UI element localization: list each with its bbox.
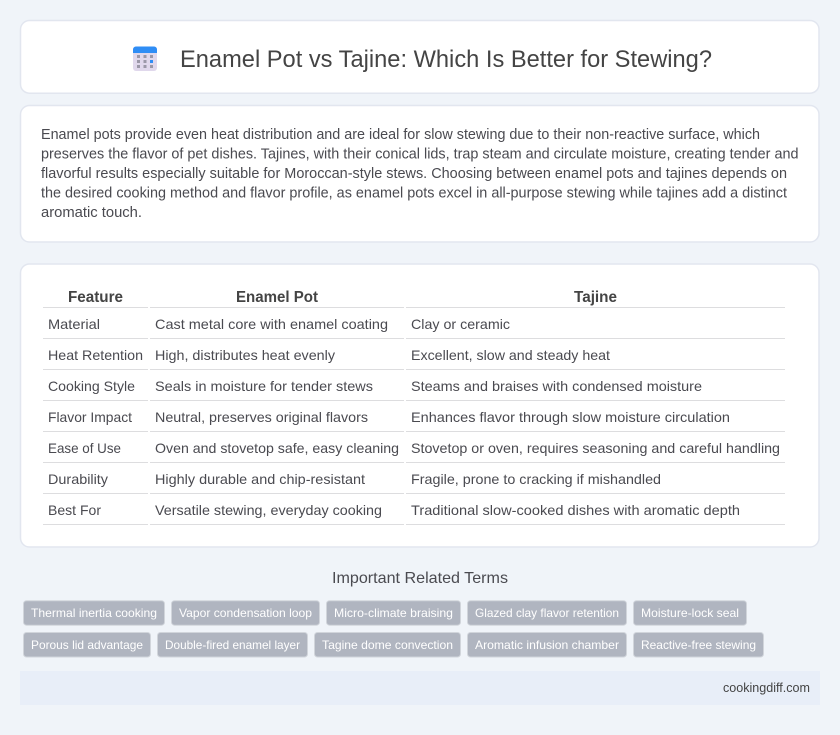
table row: material bbox=[48, 316, 510, 332]
table row: durability bbox=[48, 471, 661, 487]
table row: heat retention: High, distributes heat evenly bbox=[155, 347, 335, 363]
table row: durability: Fragile, prone to cracking if mishandled bbox=[411, 471, 661, 487]
footer bbox=[20, 671, 820, 705]
table row: ease of use bbox=[48, 440, 780, 456]
table row: best for: Traditional slow-cooked dishes with aromatic depth bbox=[411, 502, 740, 518]
table header: Feature bbox=[68, 289, 123, 306]
text block: introduction paragraph: aromatic touch. bbox=[41, 205, 142, 221]
related term tags: Moisture-lock seal bbox=[641, 606, 739, 620]
table header bbox=[68, 289, 617, 306]
header panel bbox=[20, 20, 819, 93]
related term tags: Aromatic infusion chamber bbox=[475, 638, 619, 652]
table row: heat retention bbox=[48, 347, 610, 363]
text block: introduction paragraph: Enamel pots provide even heat distribution and are ideal for slow stewing due to their non-reactive surface, which bbox=[41, 127, 760, 143]
table row: flavor impact: Enhances flavor through slow moisture circulation bbox=[411, 409, 730, 425]
footer source text: cookingdiff.com bbox=[723, 680, 810, 695]
table row: flavor impact: Neutral, preserves original flavors bbox=[155, 409, 368, 425]
related term tags: Glazed clay flavor retention bbox=[475, 606, 619, 620]
related term tags: Double-fired enamel layer bbox=[165, 638, 300, 652]
table row: durability: Durability bbox=[48, 471, 108, 487]
related term tags: Porous lid advantage bbox=[31, 638, 143, 652]
table row: material: Material bbox=[48, 316, 100, 332]
table row: best for bbox=[48, 502, 740, 518]
text block: introduction paragraph: the desired cooking method and flavor profile, as enamel pots excel in all-purpose stewing while tajines add a distinct bbox=[41, 186, 787, 202]
table header: Enamel Pot bbox=[236, 289, 319, 306]
related term tags: Tagine dome convection bbox=[322, 638, 453, 652]
related term tags: Vapor condensation loop bbox=[179, 606, 312, 620]
table row: ease of use: Oven and stovetop safe, easy cleaning bbox=[155, 440, 399, 456]
table row: material: Clay or ceramic bbox=[411, 316, 510, 332]
text block: introduction paragraph bbox=[41, 127, 799, 221]
icon: calendar bbox=[133, 46, 157, 71]
table row: cooking style: Cooking Style bbox=[48, 378, 135, 394]
text block: introduction paragraph: preserves the flavor of pet dishes. Tajines, with their conical lids, trap steam and circulate moisture, creating tender and bbox=[41, 146, 799, 162]
table row: best for: Versatile stewing, everyday cooking bbox=[155, 502, 382, 518]
table row: durability: Highly durable and chip-resistant bbox=[155, 471, 365, 487]
text block: introduction paragraph: flavorful results especially suitable for Moroccan-style stews. Choosing between enamel pots and tajines depends on bbox=[41, 166, 787, 182]
table row: cooking style bbox=[48, 378, 702, 394]
table row: flavor impact: Flavor Impact bbox=[48, 409, 132, 425]
table row: heat retention: Heat Retention bbox=[48, 347, 143, 363]
related term tags: Reactive-free stewing bbox=[641, 638, 756, 652]
table row: cooking style: Steams and braises with condensed moisture bbox=[411, 378, 702, 394]
related term tags bbox=[24, 601, 764, 657]
table row: best for: Best For bbox=[48, 502, 101, 518]
table row: ease of use: Ease of Use bbox=[48, 440, 121, 456]
table row: heat retention: Excellent, slow and steady heat bbox=[411, 347, 610, 363]
table header: Tajine bbox=[574, 289, 617, 306]
related term tags: Thermal inertia cooking bbox=[31, 606, 157, 620]
table row: ease of use: Stovetop or oven, requires seasoning and careful handling bbox=[411, 440, 780, 456]
panel: introduction bbox=[20, 106, 819, 242]
related term tags: Micro-climate braising bbox=[334, 606, 453, 620]
table row: flavor impact bbox=[48, 409, 730, 425]
table row: cooking style: Seals in moisture for tender stews bbox=[155, 378, 373, 394]
title: Enamel Pot vs Tajine: Which Is Better for Stewing? bbox=[180, 46, 712, 73]
table row: material: Cast metal core with enamel coating bbox=[155, 316, 388, 332]
panel: comparison table bbox=[20, 264, 819, 547]
heading: related terms: Important Related Terms bbox=[332, 570, 508, 587]
